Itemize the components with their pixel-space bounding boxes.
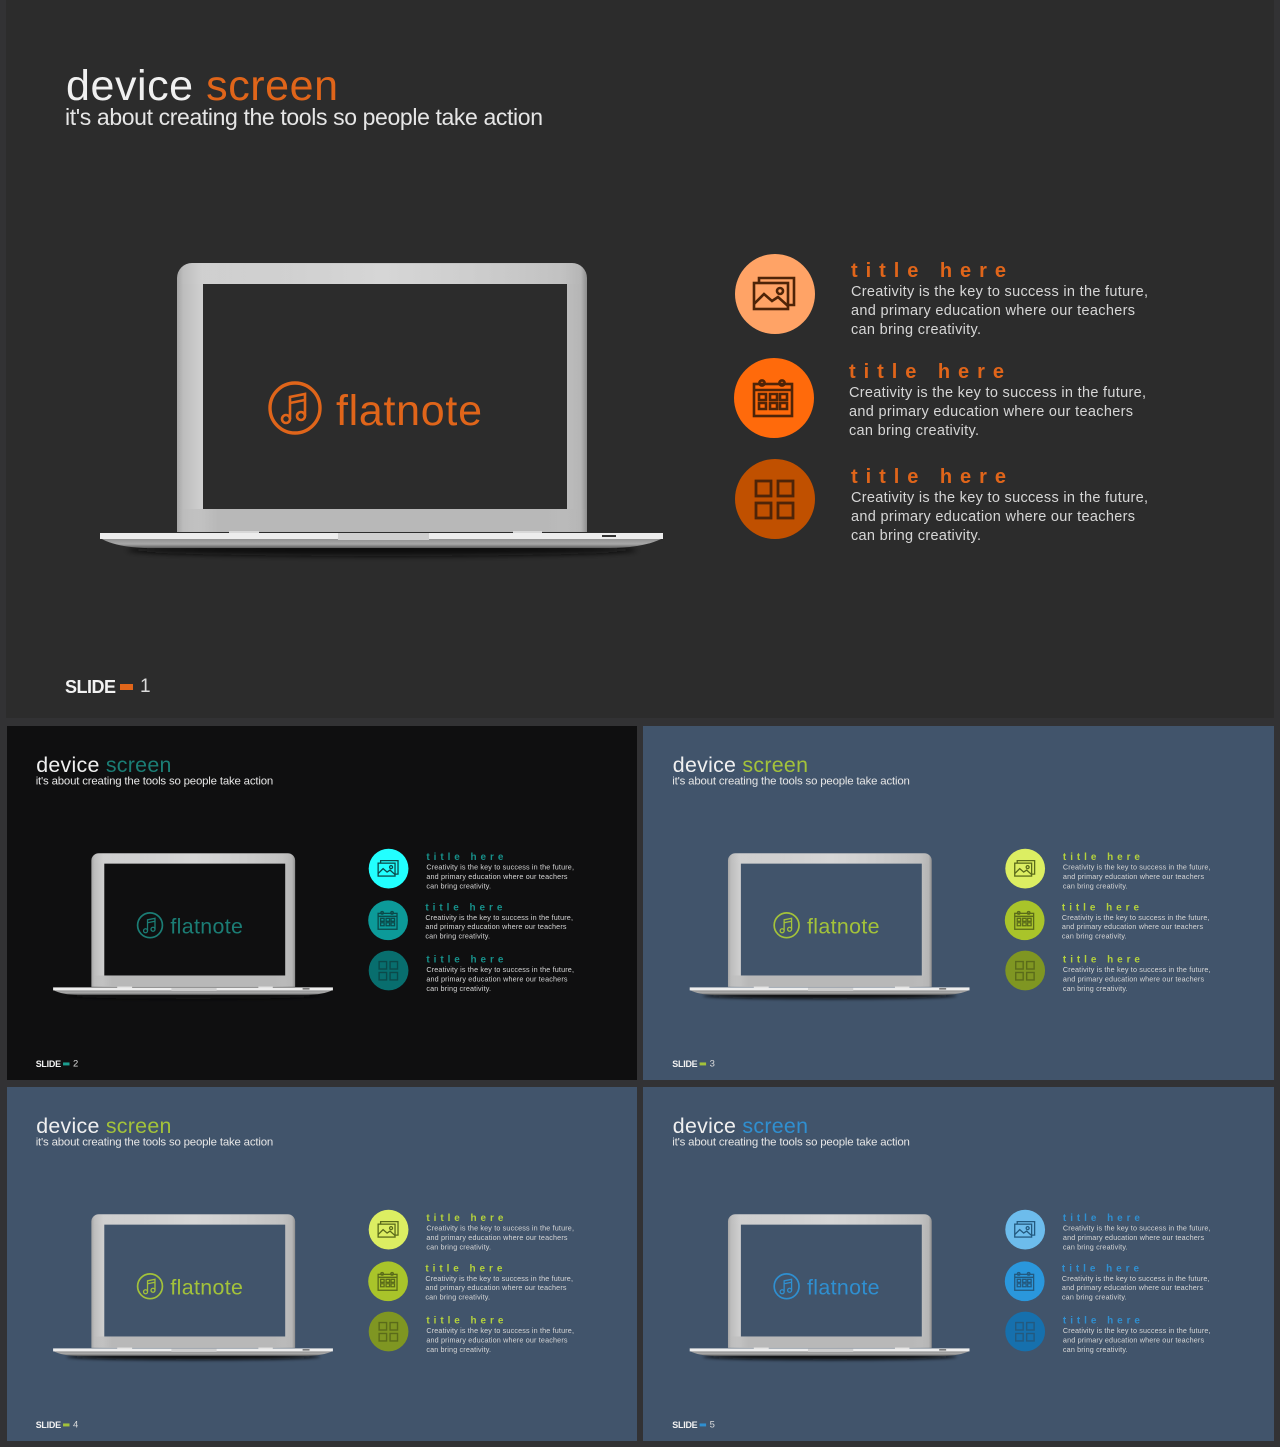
text block 1: Creativity is the key to success in the future, [426,1224,574,1233]
text block 1: Creativity is the key to success in the future, [851,284,1148,300]
text block 1: can bring creativity. [426,881,491,890]
text block 2: can bring creativity. [425,1293,490,1302]
icon: photo circle [1005,849,1045,888]
text block 2: Creativity is the key to success in the future, [1062,1274,1210,1283]
panel: slide 4 [7,1087,637,1441]
text block 1: Creativity is the key to success in the future, [426,863,574,872]
panel: slide 3 [643,726,1274,1080]
logo wordmark: flatnote [807,1276,880,1300]
text block 3: and primary education where our teachers [426,1335,568,1344]
text block 2: title here [849,361,1004,383]
slide number: 3 [710,1058,715,1069]
text block 1: title here [1063,1213,1140,1224]
title: device screen [673,753,808,777]
icon: music note logo [138,1274,162,1299]
laptop screen [741,864,922,975]
text block 3: Creativity is the key to success in the future, [1063,965,1211,974]
text block 2 [425,902,573,941]
text block 3: and primary education where our teachers [851,509,1135,525]
text block 2: title here [425,1263,503,1274]
text block 1: and primary education where our teachers [1063,1233,1205,1242]
icon: grid circle [1005,1312,1045,1351]
slide number [36,1058,78,1069]
slide number [672,1419,715,1430]
text block 1: title here [426,852,504,863]
subtitle: it's about creating the tools so people take action [672,1137,910,1149]
icon: photo circle [735,254,815,334]
icon: grid circle [735,459,815,539]
text block 3: title here [851,466,1006,488]
title: device screen [36,753,171,777]
panel: slide 1 [6,0,1274,718]
slide number [65,676,151,697]
text block 3: title here [1063,1316,1140,1327]
text block 2 [425,1263,573,1302]
text block 2 [1062,902,1210,941]
slide number: SLIDE [36,1420,61,1430]
text block 2: Creativity is the key to success in the future, [849,385,1146,401]
text block 3: can bring creativity. [426,1345,491,1354]
laptop [690,1214,970,1360]
laptop [53,853,333,999]
slide number: SLIDE [36,1059,61,1069]
text block 1 [426,852,574,890]
laptop screen [104,1225,285,1336]
slide number: 2 [73,1058,78,1069]
icon: grid circle [369,951,408,990]
text block 3 [851,466,1148,544]
text block 3: can bring creativity. [1063,1345,1128,1354]
text block 2 [849,361,1146,439]
text block 2: Creativity is the key to success in the future, [425,1274,573,1283]
text block 2: and primary education where our teachers [1062,922,1204,931]
laptop screen [203,284,567,509]
text block 3: title here [426,1316,504,1327]
text block 3: Creativity is the key to success in the future, [1063,1326,1211,1335]
text block 2: title here [1062,1263,1139,1274]
icon: music note logo [774,913,799,938]
text block 2: and primary education where our teachers [425,922,567,931]
text block 1: and primary education where our teachers [426,1233,568,1242]
text block 3 [1063,1316,1211,1354]
title: device screen [36,1114,171,1138]
slide number: SLIDE [672,1420,698,1430]
text block 2: and primary education where our teachers [849,404,1133,420]
icon: grid circle [369,1312,408,1351]
text block 3: can bring creativity. [426,984,491,993]
text block 2: can bring creativity. [425,932,490,941]
text block 1: and primary education where our teachers [1063,872,1205,881]
slide number: SLIDE [672,1059,698,1069]
slide number: 5 [710,1419,715,1430]
text block 1: can bring creativity. [426,1242,491,1251]
panel: slide 2 [7,726,637,1080]
text block 2: Creativity is the key to success in the future, [425,913,573,922]
title: device screen [66,62,338,110]
slide number: 4 [73,1419,78,1430]
text block 1: can bring creativity. [1063,1242,1128,1251]
slide number: 1 [140,676,151,697]
logo wordmark: flatnote [170,915,243,939]
text block 3: and primary education where our teachers [1063,974,1205,983]
text block 1: and primary education where our teachers [851,303,1135,319]
text block 3: title here [1063,955,1140,966]
icon: calendar circle [734,358,814,438]
laptop [100,263,663,556]
icon: photo circle [1005,1210,1045,1249]
icon: photo circle [369,1210,408,1249]
text block 3 [1063,955,1211,993]
subtitle: it's about creating the tools so people take action [65,104,543,130]
text block 1: title here [426,1213,504,1224]
text block 3: can bring creativity. [851,528,981,544]
text block 3: Creativity is the key to success in the future, [426,965,574,974]
text block 1: can bring creativity. [1063,881,1128,890]
slide number [672,1058,715,1069]
panel: slide 5 [643,1087,1274,1441]
subtitle: it's about creating the tools so people take action [36,776,273,788]
text block 3: title here [426,955,504,966]
logo wordmark: flatnote [170,1276,243,1300]
icon: calendar circle [368,900,408,940]
text block 3 [426,1316,574,1354]
text block 2: and primary education where our teachers [1062,1283,1204,1292]
text block 2: Creativity is the key to success in the future, [1062,913,1210,922]
icon: music note logo [270,383,320,433]
text block 2: can bring creativity. [1062,932,1127,941]
text block 3: and primary education where our teachers [426,974,568,983]
icon: music note logo [138,913,162,938]
subtitle: it's about creating the tools so people take action [672,776,910,788]
logo wordmark: flatnote [807,915,880,939]
text block 2: can bring creativity. [1062,1293,1127,1302]
text block 1: title here [851,260,1006,282]
text block 2: title here [425,902,503,913]
text block 1: can bring creativity. [851,322,981,338]
text block 2 [1062,1263,1210,1302]
text block 3: can bring creativity. [1063,984,1128,993]
slide number [36,1419,78,1430]
icon: grid circle [1005,951,1045,990]
text block 1 [1063,1213,1211,1251]
text block 2: and primary education where our teachers [425,1283,567,1292]
laptop screen [741,1225,922,1336]
text block 2: can bring creativity. [849,423,979,439]
text block 3: Creativity is the key to success in the future, [851,490,1148,506]
text block 1: Creativity is the key to success in the future, [1063,863,1211,872]
text block 2: title here [1062,902,1139,913]
text block 1: title here [1063,852,1140,863]
text block 3 [426,955,574,993]
laptop [690,853,970,999]
text block 1 [426,1213,574,1251]
logo wordmark: flatnote [336,387,482,435]
text block 1 [1063,852,1211,890]
slide number: SLIDE [65,677,116,697]
text block 1 [851,260,1148,338]
icon: photo circle [369,849,408,888]
icon: calendar circle [368,1261,408,1301]
title: device screen [673,1114,808,1138]
text block 3: Creativity is the key to success in the future, [426,1326,574,1335]
subtitle: it's about creating the tools so people take action [36,1137,273,1149]
icon: calendar circle [1005,900,1045,940]
text block 3: and primary education where our teachers [1063,1335,1205,1344]
text block 1: Creativity is the key to success in the future, [1063,1224,1211,1233]
icon: music note logo [774,1274,799,1299]
laptop screen [104,864,285,975]
laptop [53,1214,333,1360]
text block 1: and primary education where our teachers [426,872,568,881]
icon: calendar circle [1005,1261,1045,1301]
